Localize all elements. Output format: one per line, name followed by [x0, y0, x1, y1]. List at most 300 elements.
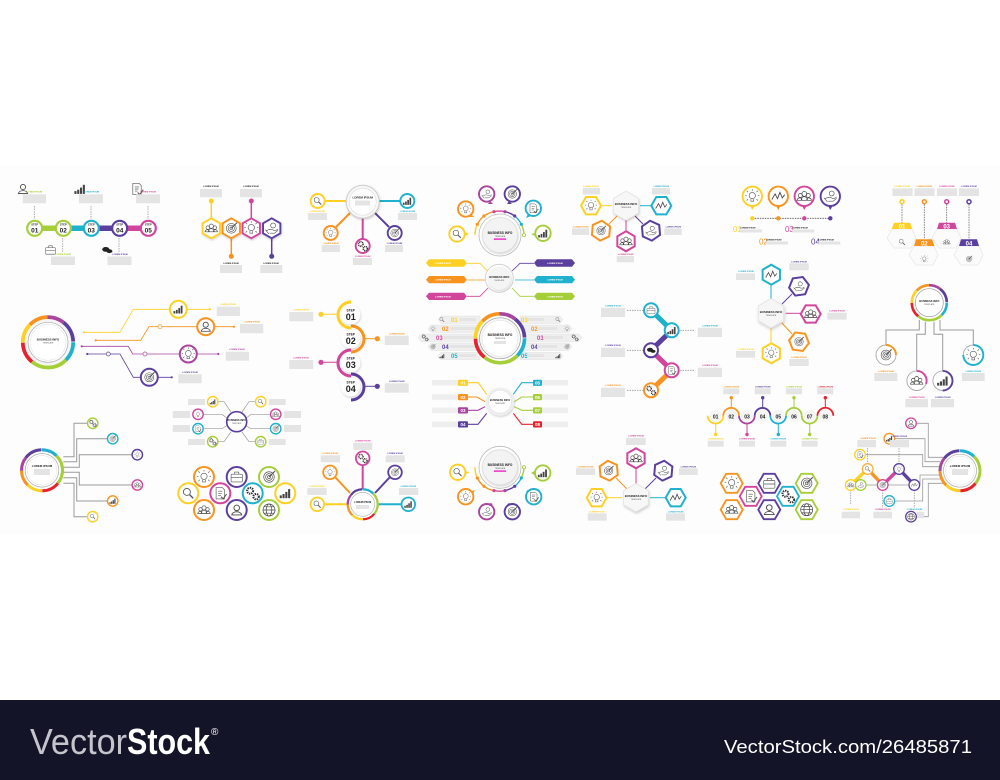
text blocks: LOREM IPSUM: [961, 186, 977, 188]
text blocks: LOREM IPSUM: [909, 397, 925, 399]
text blocks: LOREM IPSUM: [791, 261, 807, 263]
stems: [211, 201, 272, 256]
step numbers: 02: [921, 242, 928, 248]
panel: four hexagons row: [200, 186, 282, 273]
panel: four trapezoid hex steps: [887, 186, 983, 265]
center ring: TEMPLATE: [232, 422, 242, 425]
chain icons: [647, 307, 676, 395]
panel: ring with ten ribbons: [418, 313, 582, 363]
line dots: [81, 308, 235, 378]
panel: eight numbered tabs: [432, 380, 568, 428]
chain bands: [851, 469, 914, 485]
step circles: [27, 221, 156, 236]
chain circles: [644, 303, 679, 397]
text blocks: LOREM IPSUM: [140, 192, 156, 194]
center title: [488, 231, 513, 240]
main ring: LOREM IPSUM: [950, 464, 971, 468]
text blocks: LOREM IPSUM: [355, 441, 371, 443]
tag labels: LOREM IPSUM: [547, 280, 563, 282]
text blocks: LOREM IPSUM: [878, 371, 894, 373]
step labels: STEP: [347, 356, 356, 360]
tag labels: LOREM IPSUM: [547, 263, 563, 265]
connectors: [771, 285, 800, 343]
panel: four pins timeline: [733, 187, 840, 246]
text blocks: LOREM IPSUM: [618, 254, 634, 256]
step labels: [31, 222, 152, 234]
step labels: 05: [145, 228, 152, 234]
icons: [18, 183, 143, 254]
text blocks: LOREM IPSUM: [203, 186, 219, 188]
text blocks: [200, 186, 282, 273]
text blocks: LOREM IPSUM: [818, 386, 833, 388]
step numbers: 07: [807, 414, 813, 420]
text blocks: [601, 306, 722, 397]
bubble icons: [183, 470, 290, 516]
panel: vertical chain: [601, 303, 722, 397]
text blocks: [874, 371, 985, 407]
step labels: 01: [31, 228, 39, 234]
colored lines: [82, 309, 234, 377]
text blocks: LOREM IPSUM: [892, 436, 907, 438]
text blocks: LOREM IPSUM: [939, 186, 955, 188]
text blocks: LOREM IPSUM: [917, 186, 932, 188]
footer logo: Stock: [127, 721, 211, 762]
bubbles: [178, 467, 295, 520]
center ring: [227, 412, 247, 432]
connectors: [325, 201, 400, 239]
dashed stems: [902, 202, 969, 239]
text blocks: LOREM IPSUM: [55, 254, 71, 256]
hexagon icons: [725, 476, 813, 516]
center hexagon: BUSINESS INFO: [615, 202, 638, 206]
text blocks: LOREM IPSUM: [323, 243, 339, 245]
numbered notes: 04: [811, 238, 820, 246]
arc dots: [476, 210, 526, 237]
colored arcs: [886, 345, 983, 390]
tab numbers: 01: [460, 380, 466, 386]
step labels: STEP: [347, 380, 356, 384]
step discs: [710, 410, 831, 422]
panel: six arrow tags: [426, 259, 575, 300]
connecting bands: [40, 226, 142, 231]
arc dots: [476, 466, 526, 492]
step numbers: 05: [776, 414, 781, 420]
text blocks: LOREM IPSUM: [221, 304, 236, 306]
connectors: [467, 263, 534, 296]
panel: four steps vertical: [289, 302, 409, 400]
text blocks: LOREM IPSUM: [309, 486, 325, 488]
text blocks: [842, 436, 924, 518]
text blocks: LOREM IPSUM: [843, 509, 859, 511]
text blocks: LOREM IPSUM: [401, 486, 416, 488]
step labels: 03: [346, 360, 356, 370]
satellite icons: [585, 200, 667, 245]
hexagon icons: [205, 221, 278, 234]
text blocks: LOREM IPSUM: [724, 386, 739, 388]
ribbon numbers: [436, 318, 544, 360]
text blocks: [736, 261, 847, 366]
step numbers: 01: [899, 224, 906, 230]
panel: radial five satellites: [308, 185, 417, 265]
satellite icons: [847, 420, 918, 520]
satellite icons: [90, 420, 141, 519]
step numbers: 02: [729, 414, 734, 420]
text blocks: LOREM IPSUM: [755, 386, 771, 388]
step numbers: 03: [943, 224, 951, 230]
dashed leaders: [627, 310, 695, 390]
step labels: 01: [346, 312, 356, 322]
hexagons: [203, 218, 280, 238]
center disc: [485, 264, 513, 292]
pin icons: [745, 189, 837, 202]
panel: hexagon radial middle: [736, 261, 847, 366]
dotted arc: [475, 211, 524, 235]
step labels: [346, 308, 356, 394]
text blocks: [308, 211, 417, 265]
text blocks: LOREM IPSUM: [578, 466, 594, 468]
ribbon numbers: 04: [442, 345, 449, 351]
left ribbons: [418, 316, 480, 360]
tab numbers: 05: [535, 380, 540, 386]
text blocks: LOREM IPSUM: [605, 345, 621, 347]
center hexagon: TEMPLATE: [766, 314, 777, 317]
pins: [743, 187, 840, 206]
text blocks: LOREM IPSUM: [27, 192, 42, 194]
satellites: [845, 418, 920, 522]
connectors: [601, 206, 651, 231]
pointers: [465, 201, 535, 236]
ribbon numbers: 01: [451, 318, 458, 324]
center title: BUSINESS INFO: [488, 231, 513, 235]
ribbon numbers: 02: [442, 327, 449, 333]
step labels: STEP: [145, 222, 152, 226]
stem dots: [209, 198, 274, 259]
text blocks: [576, 436, 698, 521]
grey connectors: [203, 402, 270, 442]
numbered notes: 02: [759, 238, 768, 246]
text blocks: LOREM IPSUM: [573, 226, 589, 228]
main ring: [23, 317, 73, 368]
arcs: [338, 302, 364, 400]
text blocks: LOREM IPSUM: [322, 453, 338, 455]
text blocks: LOREM IPSUM: [387, 453, 403, 455]
step numbers: 04: [966, 242, 973, 248]
text blocks: LOREM IPSUM: [263, 263, 279, 265]
text blocks: LOREM IPSUM: [668, 511, 684, 513]
step numbers: 08: [823, 414, 828, 420]
line dots: [750, 216, 832, 220]
step numbers: [713, 414, 828, 420]
tab numbers: 03: [460, 408, 466, 413]
grey bars: [432, 380, 568, 427]
dotted arc: [475, 467, 524, 491]
satellite hexagons: [587, 448, 686, 506]
numbered notes: 03: [785, 225, 794, 234]
text blocks: LOREM IPSUM: [738, 271, 754, 273]
satellite icons: [453, 189, 547, 238]
numbered notes: LOREM IPSUM: [818, 240, 834, 242]
satellites: [310, 452, 415, 511]
panel: ring with branching tree: [22, 418, 142, 522]
center hexagon: TEMPLATE: [621, 206, 632, 209]
ribbon numbers: 02: [531, 327, 538, 333]
text blocks: LOREM IPSUM: [583, 186, 599, 188]
text blocks: LOREM IPSUM: [791, 357, 807, 359]
main ring: TEMPLATE: [924, 303, 935, 306]
text blocks: LOREM IPSUM: [605, 306, 621, 308]
panel: hexagon icon cluster: [721, 474, 818, 519]
satellite icons: [591, 454, 681, 502]
ribbon icons: [422, 317, 578, 358]
center disc: [486, 388, 514, 416]
panel: hexagon radial top: [572, 186, 682, 262]
center hexagon: [624, 484, 648, 512]
dashed leaders: [851, 448, 914, 508]
satellites: [88, 418, 142, 522]
hexagons: [721, 474, 818, 519]
tag labels: LOREM IPSUM: [547, 296, 563, 298]
footer logo: [30, 721, 219, 762]
text blocks: LOREM IPSUM: [708, 438, 724, 440]
text blocks: LOREM IPSUM: [243, 186, 259, 188]
numbered notes: LOREM IPSUM: [740, 228, 756, 230]
main ring: BUSINESS INFO: [488, 333, 513, 337]
panel: hexagon radial bottom: [576, 436, 698, 521]
text blocks: LOREM IPSUM: [310, 211, 325, 213]
satellite icons: [145, 306, 210, 382]
satellites: [141, 301, 214, 386]
ribbon numbers: 05: [521, 354, 528, 360]
step labels: STEP: [31, 222, 38, 226]
center disc: TEMPLATE: [494, 279, 505, 282]
ribbon numbers: 01: [521, 318, 528, 324]
center ring: LOREM IPSUM: [354, 501, 371, 504]
step labels: STEP: [88, 222, 95, 226]
panel: radial with ring bottom: [307, 441, 418, 519]
text blocks: LOREM IPSUM: [966, 371, 981, 373]
panel: circle icon cluster: [178, 467, 295, 520]
tab numbers: 06: [535, 395, 540, 400]
card icons: [899, 239, 972, 262]
dashed line: [752, 217, 830, 219]
step labels: STEP: [347, 332, 356, 336]
text blocks: LOREM IPSUM: [860, 438, 876, 440]
panel: five step timeline: [18, 183, 160, 265]
center disc: BUSINESS INFO: [489, 275, 509, 279]
infographic band: [0, 165, 1000, 535]
ribbon numbers: 03: [537, 336, 544, 342]
text blocks: LOREM IPSUM: [702, 326, 718, 328]
tab numbers: 04: [460, 422, 466, 427]
text blocks: [892, 186, 979, 196]
footer logo: Vector: [30, 721, 127, 762]
ribbon numbers: 03: [436, 336, 443, 342]
step labels: STEP: [347, 308, 356, 312]
stems and dots: [714, 396, 827, 436]
text blocks: LOREM IPSUM: [907, 509, 922, 511]
text blocks: LOREM IPSUM: [182, 372, 198, 374]
tab numbers: 02: [460, 395, 466, 400]
text blocks: LOREM IPSUM: [400, 211, 415, 213]
step labels: STEP: [116, 222, 123, 226]
text blocks: LOREM IPSUM: [355, 256, 371, 258]
tag labels: LOREM IPSUM: [435, 263, 451, 265]
satellite hexagons: [581, 197, 671, 251]
step numbers: [899, 224, 973, 248]
satellite icons: [314, 454, 412, 508]
white hexagon cards: [887, 229, 983, 265]
step labels: 03: [88, 228, 95, 234]
satellite icons: [194, 399, 279, 445]
text blocks: LOREM IPSUM: [112, 254, 128, 256]
right ribbons: [520, 316, 582, 360]
chain bands: [651, 310, 672, 390]
text blocks: LOREM IPSUM: [681, 466, 696, 468]
satellite hexagons: [763, 265, 821, 363]
step numbers: 03: [744, 414, 750, 420]
center hexagon: [758, 299, 784, 328]
text blocks: LOREM IPSUM: [654, 186, 669, 188]
text blocks: LOREM IPSUM: [666, 226, 681, 228]
satellites: [193, 396, 281, 447]
step discs: [341, 306, 360, 396]
tab numbers: [460, 380, 540, 427]
panel: upper semicircle business info: [449, 186, 551, 256]
connectors: [324, 465, 401, 504]
satellites: [450, 465, 550, 519]
text blocks: LOREM IPSUM: [739, 438, 755, 440]
ribbon numbers: 05: [451, 354, 458, 360]
panel: eight-step wave: [708, 386, 833, 447]
text blocks: [173, 399, 301, 445]
text blocks: LOREM IPSUM: [389, 334, 405, 336]
text blocks: LOREM IPSUM: [894, 186, 910, 188]
text blocks: LOREM IPSUM: [628, 436, 644, 438]
ribbon text: [444, 318, 563, 357]
center hexagon: BUSINESS INFO: [625, 494, 648, 498]
satellites: [311, 194, 414, 253]
tab numbers: 07: [535, 408, 540, 413]
left tags: [426, 259, 467, 300]
satellite icons: [881, 348, 980, 386]
main ring: [911, 285, 947, 321]
main ring: TEMPLATE: [43, 342, 54, 344]
text blocks: LOREM IPSUM: [605, 385, 621, 387]
tag labels: LOREM IPSUM: [435, 296, 451, 298]
satellites: [449, 186, 551, 242]
text blocks: LOREM IPSUM: [293, 358, 309, 360]
text blocks: LOREM IPSUM: [771, 438, 786, 440]
text blocks: [289, 310, 409, 393]
center hexagon: BUSINESS INFO: [760, 310, 783, 314]
trapezoid headers: [892, 223, 979, 246]
text blocks: LOREM IPSUM: [935, 397, 951, 399]
panel: org chart ring: [874, 285, 985, 407]
step numbers: 01: [713, 414, 719, 420]
tag labels: [435, 263, 563, 298]
panel: multicolor ring with long lines: [23, 301, 263, 386]
numbered notes: LOREM IPSUM: [792, 228, 808, 230]
footer logo: ®: [211, 727, 219, 738]
center disc: [479, 214, 521, 256]
grey rings: [876, 345, 983, 391]
center ring: BUSINESS INFO: [227, 419, 246, 422]
connectors: [607, 469, 665, 498]
center disc: [479, 446, 521, 488]
numbered notes: 01: [733, 225, 742, 234]
dashed leaders: [34, 206, 148, 252]
text blocks: LOREM IPSUM: [389, 381, 405, 383]
center disc: TEMPLATE: [495, 467, 506, 470]
ribbon numbers: 04: [531, 345, 538, 351]
main ring: BUSINESS INFO: [919, 299, 939, 303]
panel: central ring with eight satellites: [173, 396, 301, 447]
text blocks: [572, 186, 682, 262]
step numbers: 04: [760, 414, 766, 420]
step labels: 04: [116, 228, 124, 234]
grey connectors: [886, 320, 973, 371]
wave arcs: [708, 408, 833, 424]
panel: chain with ring right: [842, 418, 980, 522]
pointers: [466, 471, 534, 507]
text blocks: LOREM IPSUM: [738, 349, 754, 351]
center hexagon: [613, 191, 639, 220]
center hexagon: TEMPLATE: [631, 498, 642, 501]
text blocks: [23, 192, 160, 265]
right tags: [534, 259, 575, 300]
step labels: 02: [346, 336, 356, 346]
text blocks: [178, 304, 263, 383]
satellite icons: [454, 468, 547, 516]
text blocks: LOREM IPSUM: [702, 365, 718, 367]
text blocks: LOREM IPSUM: [387, 243, 402, 245]
center title: TEMPLATE: [495, 235, 506, 238]
text blocks: LOREM IPSUM: [786, 386, 802, 388]
text blocks: LOREM IPSUM: [589, 511, 605, 513]
satellite icons: [314, 198, 411, 251]
footer bar: [0, 700, 1000, 780]
main ring: BUSINESS INFO: [37, 338, 60, 342]
text blocks: LOREM IPSUM: [244, 322, 260, 324]
text blocks: LOREM IPSUM: [829, 311, 845, 313]
satellite icons: [765, 271, 817, 358]
text blocks: LOREM IPSUM: [229, 349, 245, 351]
grey connectors: [866, 423, 943, 517]
center disc: BUSINESS INFO: [488, 463, 513, 467]
pin pointers: [749, 204, 834, 210]
text blocks: LOREM IPSUM: [84, 192, 99, 194]
numbered notes: LOREM IPSUM: [766, 240, 782, 242]
main ring: [475, 313, 525, 363]
connectors: [467, 383, 533, 424]
center disc: BUSINESS INFO: [490, 398, 510, 402]
panel: lower semicircle business info: [450, 446, 550, 519]
grey branches: [63, 423, 132, 517]
stems and dots: [318, 312, 380, 389]
step labels: 02: [60, 228, 67, 234]
text blocks: [307, 441, 418, 495]
step labels: 04: [346, 384, 356, 394]
center disc: TEMPLATE: [495, 402, 506, 405]
text blocks: LOREM IPSUM: [293, 310, 309, 312]
text blocks: [708, 386, 833, 447]
text blocks: LOREM IPSUM: [223, 263, 239, 265]
main ring: LOREM IPSUM: [32, 464, 53, 468]
main ring: TEMPLATE: [495, 337, 506, 340]
text blocks: LOREM IPSUM: [802, 438, 818, 440]
center title: LOREM IPSUM: [352, 196, 373, 200]
footer image id: VectorStock.com/26485871: [724, 736, 972, 757]
